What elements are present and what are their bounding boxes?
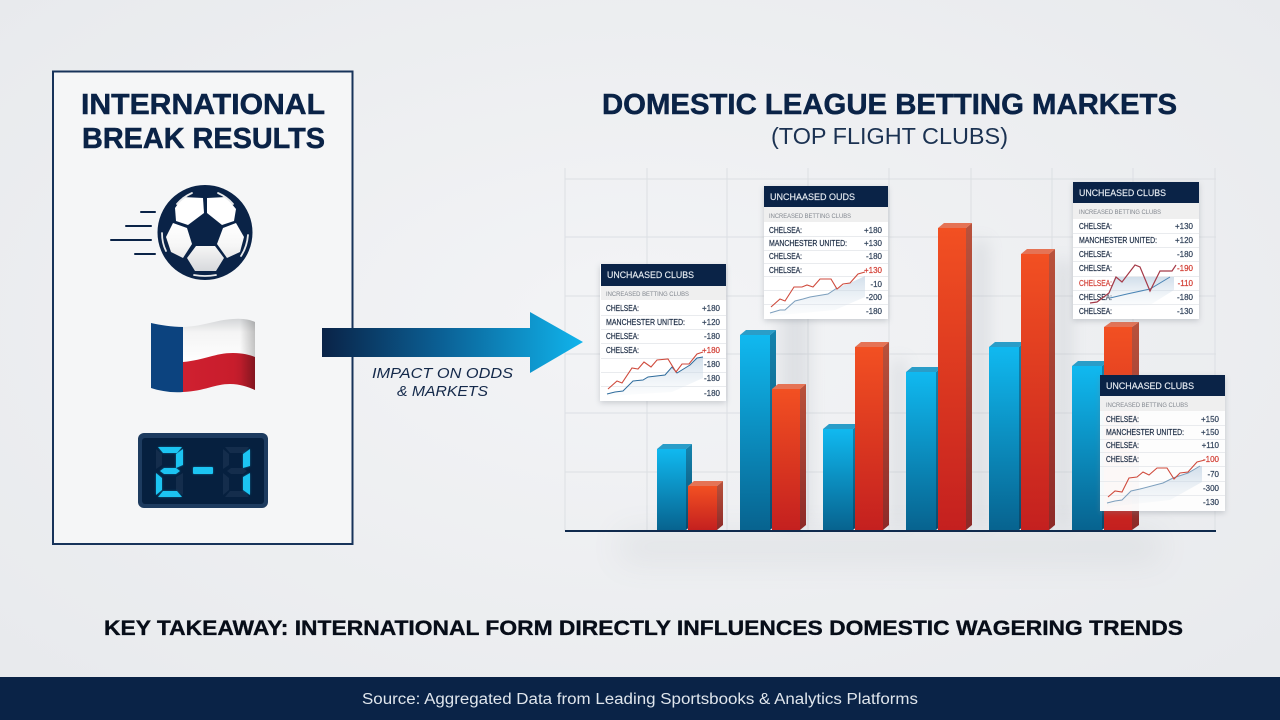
odds card 3: INCREASED BETTING CLUBS xyxy=(1079,210,1161,216)
odds card 2: UNCHAASED OUDS xyxy=(770,192,855,203)
heading: international break results: BREAK RESULTS xyxy=(82,123,325,155)
bars: group 2 xyxy=(740,330,806,530)
odds card 3: CHELSEA: xyxy=(1079,307,1112,316)
odds card 4: +110 xyxy=(1202,441,1220,450)
odds card 3: UNCHEASED CLUBS xyxy=(1079,188,1166,199)
arrow label: & MARKETS xyxy=(397,383,488,400)
odds card 4: CHELSEA: xyxy=(1106,415,1139,424)
odds card 1: +180 xyxy=(702,346,721,355)
odds card 4: -300 xyxy=(1203,484,1220,493)
footer bar with source: Source: Aggregated Data from Leading Sportsbooks & Analytics Platforms xyxy=(362,691,918,708)
bar chart xyxy=(565,168,1216,562)
odds card 1: CHELSEA: xyxy=(606,346,639,355)
bars: group 3 xyxy=(823,342,889,530)
odds card 2: CHELSEA: xyxy=(769,252,802,261)
odds card 3: CHELSEA: xyxy=(1079,222,1112,231)
bars: group 5 xyxy=(989,249,1055,530)
odds card 2 xyxy=(764,186,888,321)
odds card 3: -180 xyxy=(1177,250,1194,259)
heading: domestic league betting markets: (TOP FLIGHT CLUBS) xyxy=(771,123,1008,149)
icon: digital scoreboard 2-1 xyxy=(138,433,268,508)
heading: domestic league betting markets xyxy=(602,89,1177,149)
odds card 2: +130 xyxy=(864,239,883,248)
odds card 3 xyxy=(1073,182,1199,321)
odds card 4: CHELSEA: xyxy=(1106,455,1139,464)
odds card 3: -180 xyxy=(1177,293,1194,302)
odds card 1: CHELSEA: xyxy=(606,332,639,341)
odds card 4 xyxy=(1100,375,1225,513)
odds card 4: +150 xyxy=(1201,415,1220,424)
key takeaway: KEY TAKEAWAY: INTERNATIONAL FORM DIRECTLY INFLUENCES DOMESTIC WAGERING TRENDS xyxy=(104,616,1183,640)
odds card 3: CHELSEA: xyxy=(1079,250,1112,259)
odds card 1: INCREASED BETTING CLUBS xyxy=(606,292,689,298)
odds card 3: CHELSEA: xyxy=(1079,279,1112,288)
odds card 3: CHELSEA: xyxy=(1079,293,1112,302)
odds card 4: -100 xyxy=(1203,455,1220,464)
odds card 2: CHELSEA: xyxy=(769,266,802,275)
odds card 1: CHELSEA: xyxy=(606,304,639,313)
odds card 3: CHELSEA: xyxy=(1079,264,1112,273)
arrow: impact flow to markets xyxy=(322,312,583,373)
odds card 3: -130 xyxy=(1177,307,1194,316)
odds card 2: MANCHESTER UNITED: xyxy=(769,239,847,248)
odds card 2: -180 xyxy=(866,307,883,316)
odds card 1: +120 xyxy=(702,318,721,327)
odds card 4: CHELSEA: xyxy=(1106,441,1139,450)
arrow label xyxy=(372,365,513,400)
icon: flag xyxy=(151,319,255,392)
odds card 4: INCREASED BETTING CLUBS xyxy=(1106,403,1188,409)
odds card 4: +150 xyxy=(1201,428,1220,437)
odds card 3: -110 xyxy=(1178,279,1194,288)
odds card 2: -200 xyxy=(866,293,883,302)
odds card 4: -130 xyxy=(1203,498,1220,507)
odds card 1: -180 xyxy=(704,332,721,341)
odds card 4: UNCHAASED CLUBS xyxy=(1106,381,1194,392)
odds card 2: -180 xyxy=(866,252,883,261)
odds card 3: -190 xyxy=(1177,264,1194,273)
odds card 2: CHELSEA: xyxy=(769,226,802,235)
odds card 1: -180 xyxy=(704,360,721,369)
odds card 3: +130 xyxy=(1175,222,1194,231)
odds card 1: -180 xyxy=(704,374,721,383)
panel: international break results xyxy=(53,72,352,544)
icon: soccer ball with speed lines xyxy=(111,185,252,280)
odds card 2: -10 xyxy=(870,280,883,289)
odds card 3: +120 xyxy=(1175,236,1194,245)
bars: group 4 xyxy=(906,223,972,530)
odds card 1: MANCHESTER UNITED: xyxy=(606,318,685,327)
odds card 1: -180 xyxy=(704,389,721,398)
heading: international break results: INTERNATIONAL xyxy=(81,89,325,121)
bars: group 6 xyxy=(1072,322,1139,530)
odds card 1: +180 xyxy=(702,304,721,313)
arrow label: IMPACT ON ODDS xyxy=(372,365,513,382)
odds card 4: -70 xyxy=(1207,470,1220,479)
odds card 2: +180 xyxy=(864,226,883,235)
heading: domestic league betting markets: DOMESTIC LEAGUE BETTING MARKETS xyxy=(602,89,1177,121)
odds card 1: UNCHAASED CLUBS xyxy=(607,270,694,281)
odds card 2: INCREASED BETTING CLUBS xyxy=(769,214,851,220)
heading: international break results xyxy=(81,89,325,155)
footer bar with source xyxy=(0,677,1280,720)
odds card 3: MANCHESTER UNITED: xyxy=(1079,236,1157,245)
odds card 2: +130 xyxy=(864,266,883,275)
odds card 4: MANCHESTER UNITED: xyxy=(1106,428,1184,437)
bars: group 1 xyxy=(657,444,723,530)
odds card 1 xyxy=(600,264,726,403)
